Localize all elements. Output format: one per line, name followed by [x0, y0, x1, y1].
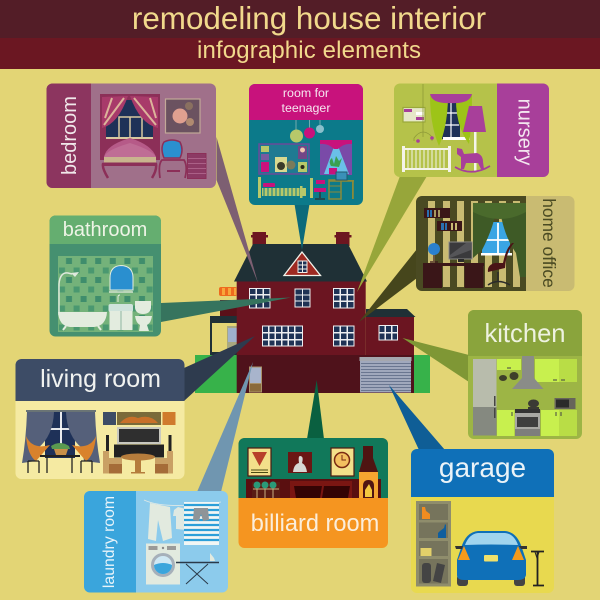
home office label: home office	[539, 198, 559, 288]
armchair	[159, 140, 186, 178]
dormer	[284, 252, 320, 276]
teenager label: room for	[283, 86, 329, 100]
iron	[210, 553, 215, 561]
tiled wall	[58, 256, 153, 332]
garage door	[360, 357, 412, 392]
office window and curtains	[473, 203, 526, 277]
bedroom label: bedroom	[59, 96, 81, 175]
panel: bedroom	[46, 84, 216, 188]
dark wainscot	[246, 479, 381, 498]
kitchen label: kitchen	[484, 320, 566, 348]
desk and chair	[310, 172, 354, 199]
ironing board	[176, 562, 219, 584]
crib	[402, 146, 451, 172]
porch	[210, 300, 237, 355]
house illustration	[195, 232, 430, 393]
lawn	[195, 355, 430, 393]
roof	[234, 244, 367, 282]
nursery label: nursery	[514, 99, 536, 165]
fridge	[473, 359, 496, 436]
chimneys	[251, 232, 352, 246]
dining table with plant	[28, 443, 92, 473]
striped towel rack	[184, 502, 219, 545]
clothesline	[144, 500, 221, 506]
title: remodeling house interior	[132, 1, 486, 36]
television	[117, 427, 161, 444]
living room label: living room	[40, 365, 161, 393]
balls poster	[248, 448, 271, 476]
panel: laundry room	[84, 491, 228, 592]
desk	[423, 263, 484, 288]
panel: bathroom	[50, 216, 161, 336]
panel: nursery	[394, 84, 549, 177]
basement	[237, 355, 414, 393]
panel: living room	[16, 359, 184, 479]
bookshelves	[424, 208, 462, 231]
pointer: kitchen	[402, 338, 469, 382]
pointer: home office	[359, 249, 417, 322]
bicycle pump	[531, 552, 544, 586]
striped wallpaper	[428, 201, 520, 287]
lower cabinets	[497, 410, 577, 436]
pendant lamps	[290, 120, 324, 142]
awning	[219, 287, 237, 296]
teenager window	[320, 140, 352, 175]
garage label: garage	[439, 452, 526, 483]
washing machine	[146, 544, 180, 584]
bathtub and shower	[58, 272, 107, 330]
toilet	[135, 301, 152, 331]
sofas	[103, 451, 173, 474]
portrait	[288, 452, 312, 473]
wall pictures	[103, 412, 176, 425]
car	[455, 531, 527, 586]
window with curtains	[100, 94, 160, 160]
teapots on shelf	[497, 370, 521, 382]
panel: kitchen	[468, 310, 582, 439]
side extension	[366, 317, 414, 356]
bathroom label: bathroom	[63, 219, 147, 241]
media unit and speakers	[106, 435, 172, 458]
shorts	[193, 508, 209, 521]
wall shelf	[403, 108, 425, 122]
monitor	[449, 242, 472, 262]
picture	[166, 99, 200, 133]
cooker hood	[512, 356, 544, 389]
pointer: garage	[389, 385, 445, 450]
floor lamp	[463, 106, 486, 172]
panel: home office	[416, 196, 574, 291]
chairs	[252, 482, 280, 498]
nursery window and curtains	[430, 94, 472, 146]
subtitle: infographic elements	[197, 37, 421, 64]
laundry room label: laundry room	[101, 496, 118, 588]
mirror	[109, 266, 133, 292]
living room window and curtains	[22, 411, 100, 463]
front door	[249, 366, 262, 392]
sink cabinet	[108, 295, 133, 330]
rocking horse	[455, 148, 490, 172]
pointer: teenager room	[294, 204, 310, 250]
header banner	[0, 0, 600, 69]
pointer: living room	[184, 336, 255, 401]
upper cabinets	[497, 359, 577, 382]
extension roof	[366, 309, 416, 317]
pointer: billiard room	[307, 380, 324, 439]
fireplace	[359, 446, 378, 498]
coffee table	[121, 454, 155, 474]
stove	[515, 409, 540, 436]
panel: billiard room	[238, 438, 388, 548]
pointer: nursery	[357, 176, 427, 292]
globe	[428, 243, 440, 262]
pointer: bathroom	[161, 298, 291, 322]
billiard room label: billiard room	[251, 511, 379, 537]
teenager label line 2: teenager	[282, 101, 330, 115]
trousers	[148, 503, 172, 541]
pointer: laundry room	[197, 362, 253, 492]
main walls	[237, 282, 366, 356]
office chair	[488, 243, 514, 285]
windows	[249, 288, 398, 346]
chest of drawers	[188, 154, 206, 178]
shirt	[173, 507, 192, 530]
bed	[258, 177, 306, 198]
pot	[528, 400, 539, 409]
microwave	[554, 398, 576, 409]
bed	[103, 138, 157, 178]
pointer: bedroom	[216, 137, 258, 283]
panel: room for teenager	[249, 84, 363, 205]
shelf with speakers	[259, 144, 309, 174]
panel: garage	[411, 449, 554, 593]
wall clock	[331, 448, 354, 476]
mobile	[414, 84, 434, 143]
storage shelves	[416, 501, 451, 586]
billiard table	[290, 481, 352, 498]
